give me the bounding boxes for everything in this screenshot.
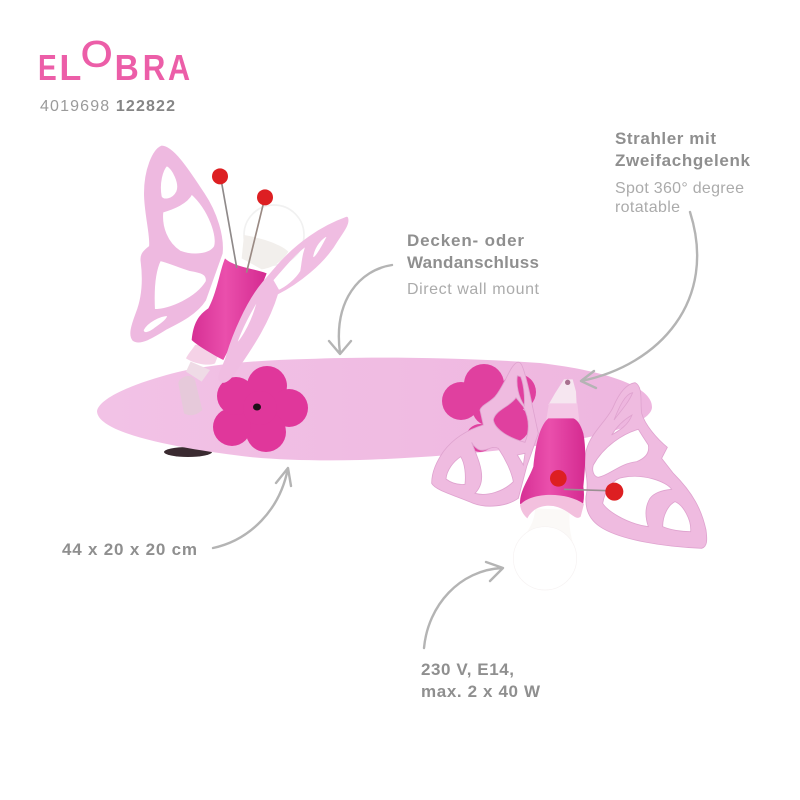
article number: 4019698 122822 [40,98,175,115]
butterfly lamp right [432,362,707,590]
logo: ELOBRA [38,34,190,89]
arrow: spot joint [581,212,697,388]
logo: ELOBRA: B [115,49,139,88]
callout: electrical [421,660,541,701]
lamp foot and joint [178,345,218,415]
socket ring [520,495,584,518]
logo: ELOBRA: L [59,47,81,88]
logo: ELOBRA: R [143,48,165,89]
butterfly lamp left [131,147,347,415]
callout: mount: Decken- oder [407,231,524,250]
antennae [550,470,623,501]
logo: ELOBRA: E [38,48,57,88]
lamp base plate [97,358,652,460]
callout: dimensions: 44 x 20 x 20 cm [62,540,197,559]
callout: spot joint: Spot 360° degree [615,180,744,197]
bulb [513,508,577,590]
callout: electrical: 230 V, E14, [421,660,514,679]
wing left [432,362,538,506]
wing right [585,383,707,548]
arrow: electrical [424,562,503,648]
antennae [212,168,273,272]
callout: mount: Wandanschluss [407,253,539,272]
callout: mount: Direct wall mount [407,281,540,298]
callout: spot joint: Strahler mit [615,129,716,148]
callout: mount [407,231,540,298]
flower left [213,366,308,452]
stem [546,379,579,422]
callout: electrical: max. 2 x 40 W [421,682,541,701]
body [520,418,585,513]
flower right [442,364,536,452]
bulb outline [242,205,304,269]
wing back [131,147,222,342]
logo: ELOBRA: A [168,49,190,89]
logo: ELOBRA: O [81,34,112,75]
callout: spot joint: Zweifachgelenk [615,151,751,170]
arrow: dimensions [213,468,291,548]
arrow: mount [329,265,392,354]
callout: spot joint [615,129,751,216]
wing front [220,218,347,381]
body [192,258,267,360]
callout: spot joint: rotatable [615,199,680,216]
